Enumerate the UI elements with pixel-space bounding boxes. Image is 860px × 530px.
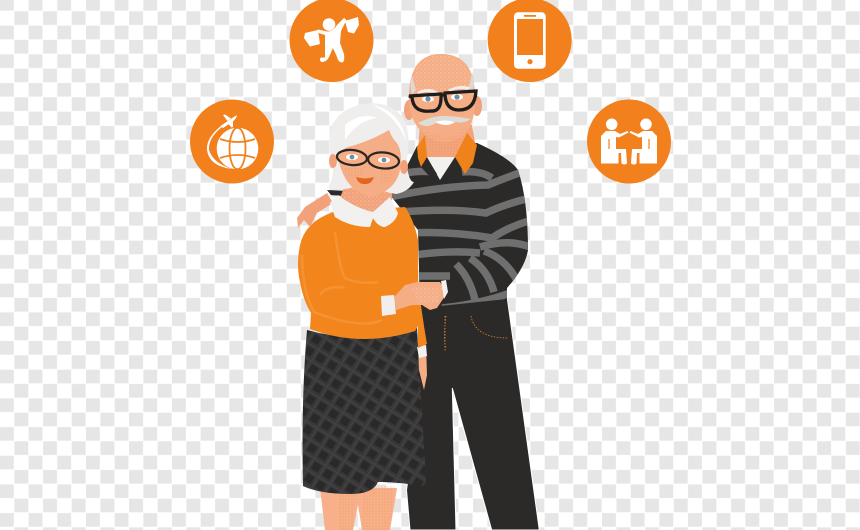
man smile — [435, 120, 455, 125]
trouser pocket stitching — [444, 316, 508, 350]
icon: travel globe and plane — [190, 100, 274, 184]
man collar and shirt — [417, 133, 477, 180]
icon: shopping person with bags — [290, 0, 374, 82]
man sleeve cuff — [441, 280, 448, 299]
woman white collar — [330, 195, 398, 227]
sweater fold shading — [302, 232, 382, 324]
woman glasses — [336, 149, 400, 170]
woman legs — [320, 486, 397, 530]
woman cuff — [417, 345, 427, 358]
man trousers — [406, 296, 539, 530]
man eyebrows — [417, 86, 470, 94]
icon: smartphone — [488, 0, 572, 82]
man moustache — [418, 116, 471, 126]
man ears — [404, 96, 482, 120]
head and beard dots — [412, 55, 472, 90]
woman neck dots — [340, 188, 392, 220]
watch strap — [327, 190, 347, 196]
woman neck — [340, 185, 392, 220]
woman skirt — [302, 328, 426, 494]
woman hair — [328, 103, 414, 194]
woman lower arm — [418, 345, 427, 390]
woman mouth — [356, 177, 374, 184]
man — [385, 54, 539, 530]
clasped hands — [381, 280, 448, 316]
woman sweater — [298, 207, 427, 348]
woman eyes — [346, 154, 390, 163]
man sweater — [390, 143, 528, 308]
icon: two people meeting at a table — [587, 100, 671, 184]
man glasses — [409, 91, 476, 111]
man eyes — [422, 94, 463, 102]
man's hand on shoulder — [297, 193, 333, 228]
illustration: senior couple — [297, 54, 539, 530]
woman sleeve cuff — [381, 295, 396, 316]
woman ears — [329, 154, 408, 174]
side hair — [410, 72, 474, 95]
woman — [297, 103, 427, 530]
cheek dots — [345, 168, 396, 182]
sweater stripes — [385, 171, 532, 308]
man neck — [418, 125, 476, 157]
woman face — [338, 130, 401, 197]
hair highlights — [345, 105, 406, 140]
man head — [409, 54, 475, 142]
